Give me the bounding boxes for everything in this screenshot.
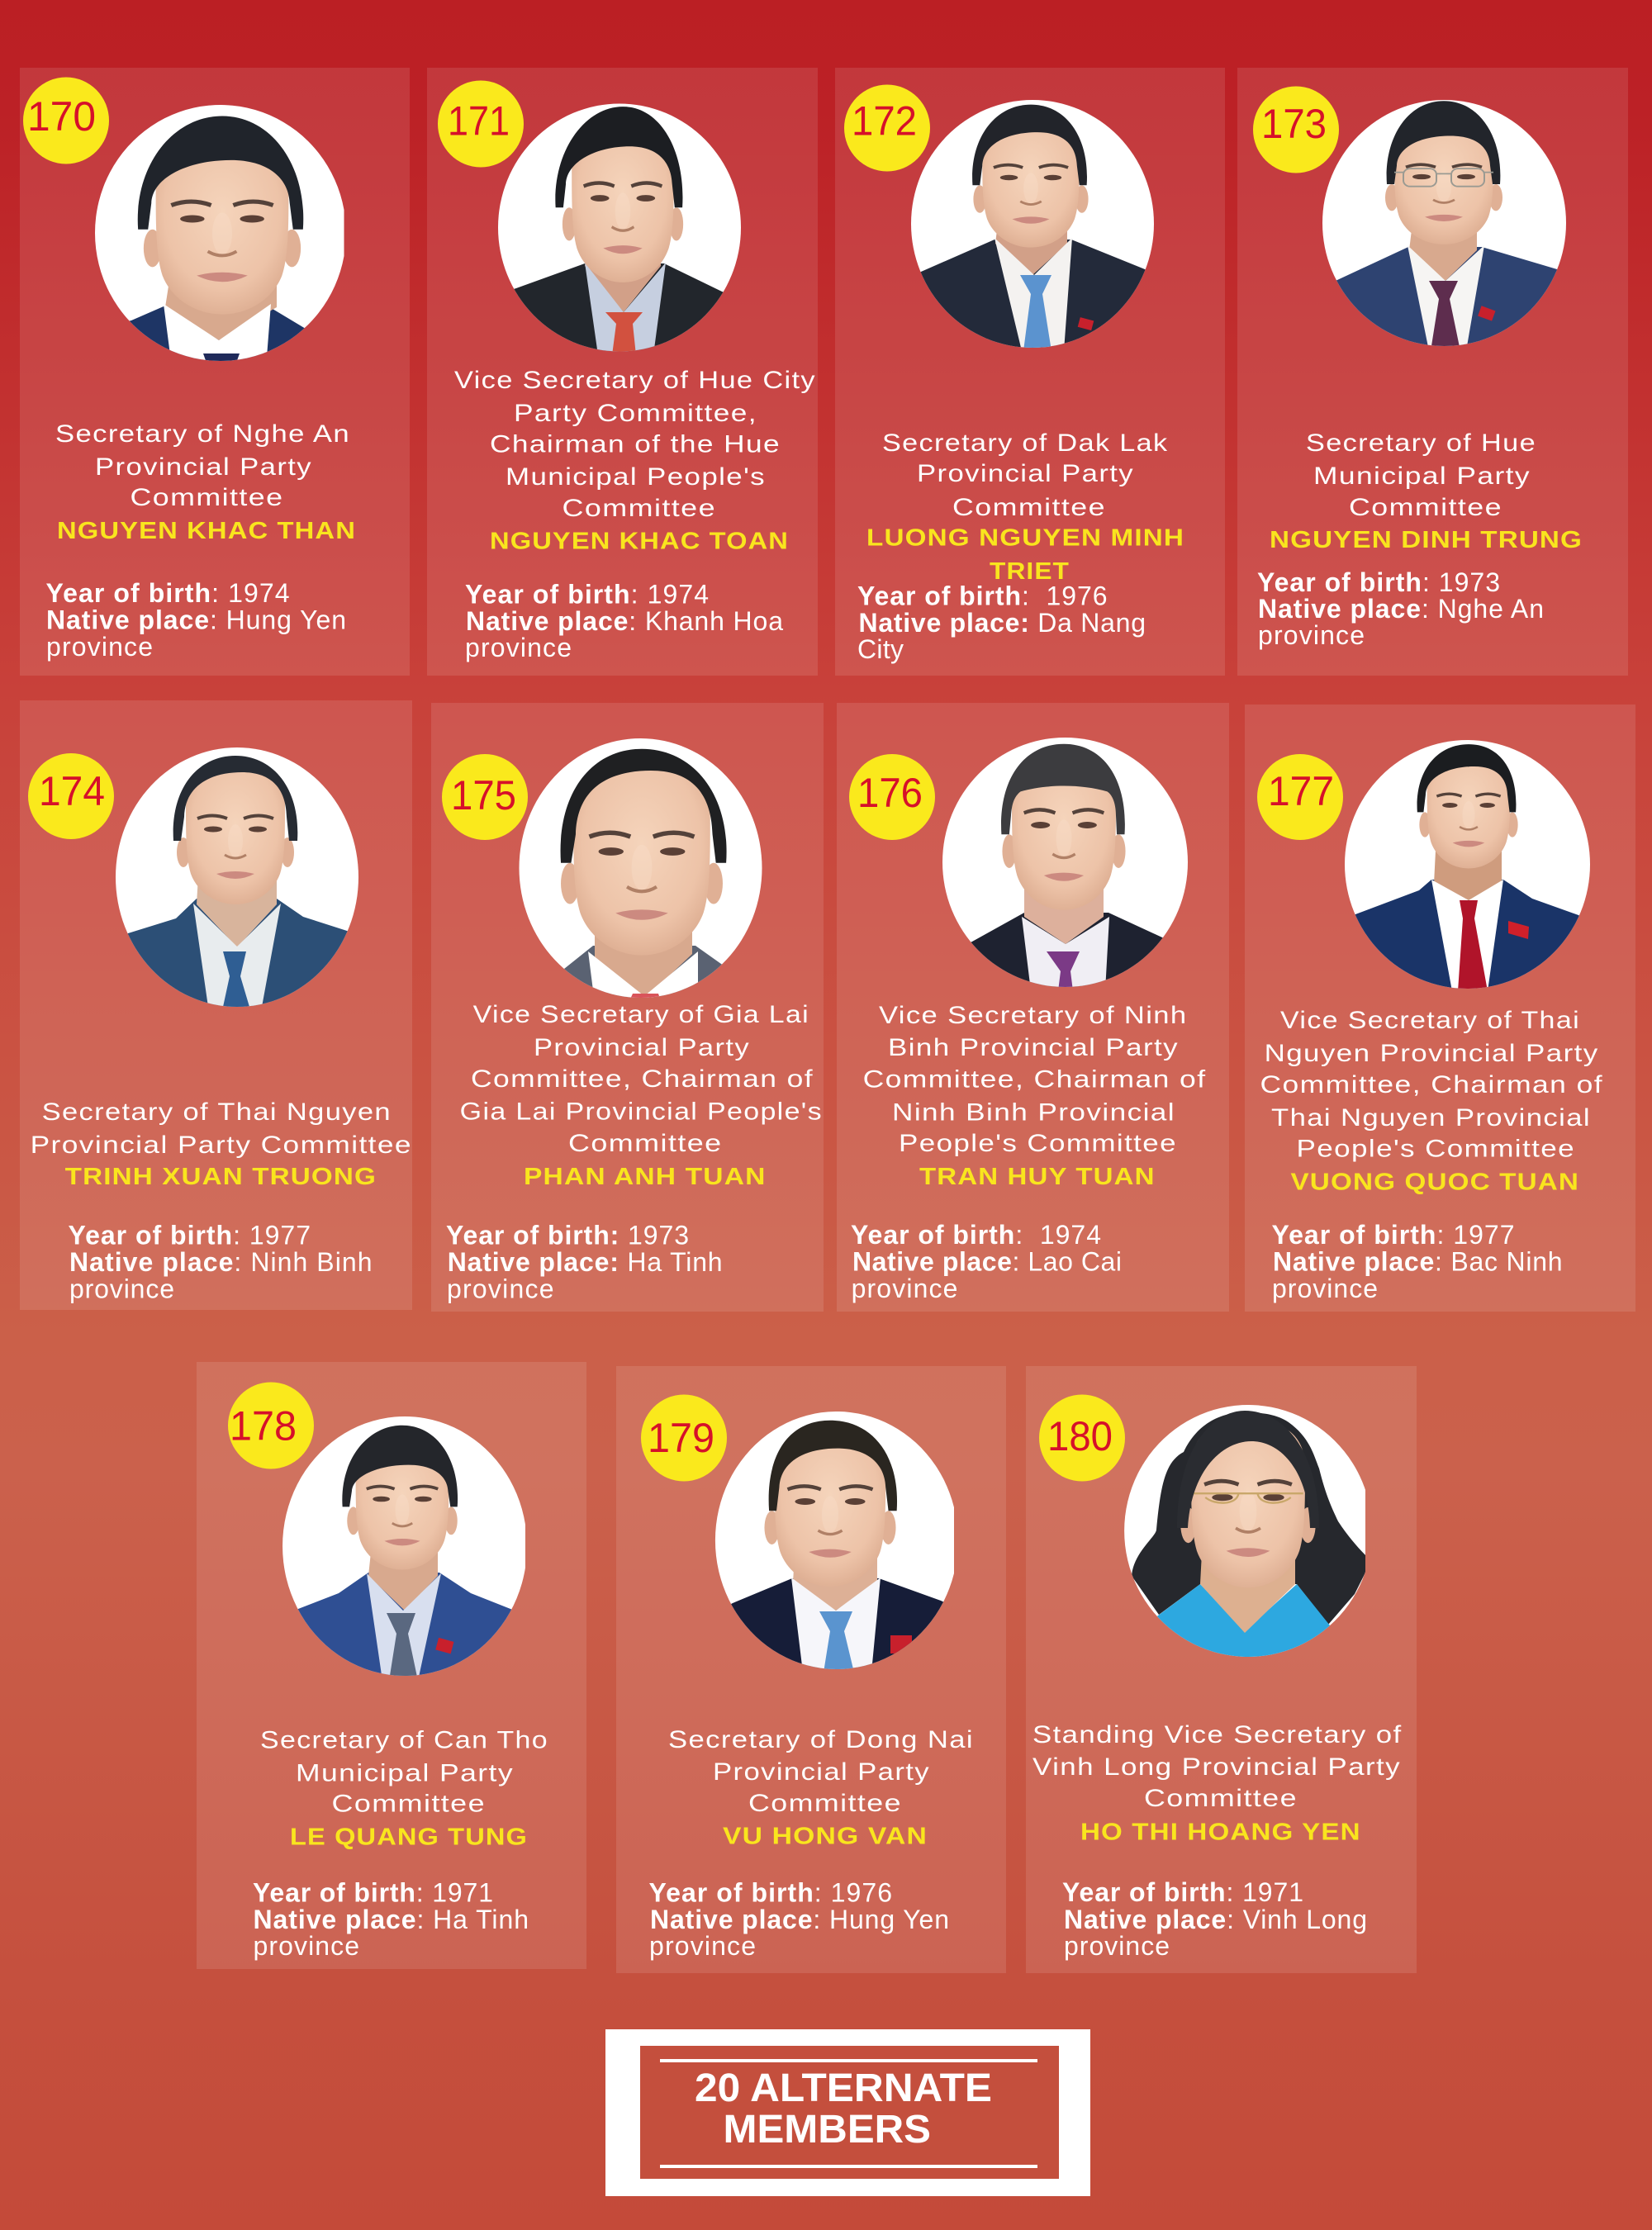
name 172: LUONG NGUYEN MINH bbox=[866, 525, 1184, 552]
role 170: Committee bbox=[131, 484, 284, 511]
panel: member 179 bbox=[616, 1366, 1006, 1973]
portrait 173 bbox=[1320, 97, 1569, 351]
details 178: Native place: Ha Tinh bbox=[253, 1905, 529, 1934]
details 179: Native place: Hung Yen bbox=[650, 1905, 949, 1934]
role 175: Gia Lai Provincial People's bbox=[460, 1098, 823, 1126]
number badge 173 bbox=[1253, 86, 1339, 173]
details 178: province bbox=[253, 1931, 359, 1961]
panel: member 170 bbox=[20, 68, 410, 676]
number badge 172 bbox=[844, 84, 930, 172]
number badge 170: 170 bbox=[27, 93, 96, 140]
role 176: Ninh Binh Provincial bbox=[892, 1099, 1175, 1127]
role 172 bbox=[882, 429, 1168, 521]
footer banner bbox=[605, 2029, 1090, 2196]
role 178 bbox=[260, 1727, 548, 1818]
details 171 bbox=[465, 580, 783, 662]
role 171 bbox=[454, 367, 816, 522]
details 172: Year of birth: 1976 bbox=[857, 581, 1107, 611]
details 173 bbox=[1257, 567, 1544, 650]
details 179: province bbox=[649, 1931, 756, 1961]
name 179: VU HONG VAN bbox=[723, 1824, 928, 1850]
role 175: Provincial Party bbox=[534, 1034, 750, 1061]
number badge 179: 179 bbox=[648, 1415, 714, 1461]
panel: member 177 bbox=[1245, 705, 1635, 1312]
details 171: Year of birth: 1974 bbox=[465, 580, 709, 610]
details 178 bbox=[253, 1878, 529, 1961]
role 176 bbox=[863, 1002, 1206, 1157]
footer title: MEMBERS bbox=[724, 2108, 931, 2152]
panel: member 174 bbox=[20, 700, 412, 1310]
role 178: Municipal Party bbox=[296, 1759, 514, 1786]
role 176: People's Committee bbox=[899, 1130, 1177, 1157]
panel: member 178 bbox=[197, 1362, 586, 1969]
panel: member 172 bbox=[835, 68, 1225, 676]
role 173: Secretary of Hue bbox=[1306, 429, 1536, 457]
name 172: TRIET bbox=[990, 558, 1070, 585]
name 173: NGUYEN DINH TRUNG bbox=[1270, 527, 1583, 553]
role 178: Committee bbox=[332, 1791, 486, 1818]
details 172: Native place: Da Nang bbox=[859, 608, 1146, 638]
number badge 173: 173 bbox=[1261, 101, 1327, 147]
details 177: province bbox=[1272, 1274, 1378, 1303]
details 177 bbox=[1272, 1220, 1563, 1303]
role 179 bbox=[668, 1726, 974, 1817]
details 175: province bbox=[447, 1274, 553, 1304]
panel: member 176 bbox=[837, 703, 1229, 1312]
role 170: Provincial Party bbox=[95, 453, 312, 481]
number badge 177: 177 bbox=[1268, 768, 1334, 814]
role 174: Provincial Party Committee bbox=[31, 1132, 412, 1159]
details 179: Year of birth: 1976 bbox=[649, 1878, 892, 1908]
portrait 179 bbox=[710, 1408, 958, 1672]
details 171: Native place: Khanh Hoa bbox=[466, 606, 783, 636]
details 174: province bbox=[69, 1274, 174, 1304]
portrait 175 bbox=[516, 735, 766, 1004]
name 177: VUONG QUOC TUAN bbox=[1290, 1170, 1579, 1196]
role 179: Committee bbox=[748, 1790, 902, 1817]
number badge 172: 172 bbox=[852, 97, 917, 144]
role 176: Committee, Chairman of bbox=[863, 1066, 1206, 1094]
role 179: Secretary of Dong Nai bbox=[668, 1726, 974, 1753]
name 180: HO THI HOANG YEN bbox=[1080, 1819, 1361, 1845]
number badge 175 bbox=[442, 754, 528, 840]
role 172: Committee bbox=[952, 494, 1106, 521]
name 175: PHAN ANH TUAN bbox=[524, 1164, 767, 1190]
portrait 178 bbox=[281, 1412, 529, 1681]
details 171: province bbox=[465, 633, 572, 662]
details 180 bbox=[1062, 1877, 1367, 1961]
number badge 179 bbox=[641, 1394, 727, 1482]
role 178: Secretary of Can Tho bbox=[260, 1727, 548, 1754]
role 177 bbox=[1260, 1007, 1603, 1163]
number badge 171 bbox=[438, 81, 524, 167]
role 174: Secretary of Thai Nguyen bbox=[42, 1098, 392, 1126]
details 170 bbox=[46, 578, 346, 662]
details 174: Native place: Ninh Binh bbox=[69, 1247, 372, 1277]
portrait 174 bbox=[116, 747, 358, 1007]
role 173 bbox=[1306, 429, 1536, 521]
number badge 178 bbox=[228, 1383, 314, 1468]
details 180: Native place: Vinh Long bbox=[1064, 1905, 1367, 1934]
role 172: Provincial Party bbox=[917, 460, 1134, 487]
number badge 174 bbox=[28, 753, 114, 839]
details 174: Year of birth: 1977 bbox=[68, 1221, 311, 1250]
details 170: Year of birth: 1974 bbox=[46, 578, 289, 608]
panel: member 173 bbox=[1237, 68, 1628, 676]
panel: member 180 bbox=[1026, 1366, 1417, 1973]
role 176: Vice Secretary of Ninh bbox=[879, 1002, 1188, 1029]
role 175: Committee bbox=[568, 1130, 723, 1157]
number badge 170 bbox=[23, 78, 109, 164]
name 178: LE QUANG TUNG bbox=[290, 1824, 528, 1850]
number badge 180 bbox=[1039, 1394, 1125, 1482]
details 178: Year of birth: 1971 bbox=[253, 1878, 493, 1908]
role 173: Committee bbox=[1349, 494, 1502, 521]
name 170: NGUYEN KHAC THAN bbox=[57, 518, 356, 544]
name 172 bbox=[866, 525, 1184, 585]
details 175: Native place: Ha Tinh bbox=[448, 1247, 723, 1277]
role 173: Municipal Party bbox=[1313, 463, 1531, 490]
footer title bbox=[695, 2066, 992, 2152]
role 177: People's Committee bbox=[1297, 1136, 1575, 1163]
name 171: NGUYEN KHAC TOAN bbox=[490, 529, 789, 555]
number badge 180: 180 bbox=[1047, 1413, 1113, 1459]
details 174 bbox=[68, 1221, 372, 1304]
details 177: Year of birth: 1977 bbox=[1272, 1220, 1515, 1250]
name 174: TRINH XUAN TRUONG bbox=[65, 1164, 377, 1190]
name 176: TRAN HUY TUAN bbox=[919, 1164, 1156, 1190]
details 176: Year of birth: 1974 bbox=[851, 1220, 1101, 1250]
number badge 171: 171 bbox=[448, 97, 510, 144]
details 170: Native place: Hung Yen bbox=[46, 605, 346, 634]
role 171: Party Committee, bbox=[514, 400, 757, 427]
details 175 bbox=[446, 1221, 723, 1304]
portrait 170 bbox=[95, 105, 344, 361]
details 173: Native place: Nghe An bbox=[1258, 594, 1544, 624]
role 177: Committee, Chairman of bbox=[1260, 1071, 1603, 1098]
role 180 bbox=[1032, 1721, 1403, 1812]
details 176: Native place: Lao Cai bbox=[852, 1247, 1122, 1277]
role 174 bbox=[31, 1098, 412, 1159]
details 175: Year of birth: 1973 bbox=[446, 1221, 689, 1250]
role 180: Committee bbox=[1144, 1785, 1298, 1812]
details 180: Year of birth: 1971 bbox=[1062, 1877, 1303, 1907]
details 179 bbox=[649, 1878, 949, 1961]
role 171: Committee bbox=[562, 495, 716, 522]
role 170: Secretary of Nghe An bbox=[55, 420, 350, 448]
role 171: Vice Secretary of Hue City bbox=[454, 367, 816, 394]
role 176: Binh Provincial Party bbox=[888, 1034, 1179, 1061]
portrait 172 bbox=[909, 97, 1156, 352]
role 179: Provincial Party bbox=[713, 1758, 930, 1786]
role 177: Vice Secretary of Thai bbox=[1280, 1007, 1580, 1034]
panel: member 175 bbox=[431, 703, 824, 1312]
number badge 176 bbox=[849, 754, 935, 840]
role 172: Secretary of Dak Lak bbox=[882, 429, 1168, 457]
number badge 175: 175 bbox=[451, 772, 516, 818]
role 177: Nguyen Provincial Party bbox=[1265, 1040, 1599, 1067]
role 171: Municipal People's bbox=[506, 463, 766, 491]
role 175 bbox=[460, 1001, 823, 1157]
details 172: City bbox=[857, 634, 904, 664]
role 175: Vice Secretary of Gia Lai bbox=[473, 1001, 809, 1028]
details 180: province bbox=[1064, 1931, 1170, 1961]
role 170 bbox=[55, 420, 350, 511]
portrait 180 bbox=[1119, 1400, 1371, 1660]
footer title: 20 ALTERNATE bbox=[695, 2066, 992, 2110]
role 175: Committee, Chairman of bbox=[471, 1065, 814, 1093]
role 180: Standing Vice Secretary of bbox=[1032, 1721, 1403, 1748]
portrait 177 bbox=[1338, 737, 1594, 991]
details 173: Year of birth: 1973 bbox=[1257, 567, 1500, 597]
role 171: Chairman of the Hue bbox=[490, 431, 781, 458]
details 172 bbox=[857, 581, 1146, 664]
details 176: province bbox=[852, 1274, 957, 1303]
role 180: Vinh Long Provincial Party bbox=[1032, 1753, 1401, 1781]
number badge 176: 176 bbox=[857, 770, 923, 816]
portrait 176 bbox=[940, 735, 1191, 991]
role 177: Thai Nguyen Provincial bbox=[1271, 1104, 1591, 1132]
details 173: province bbox=[1258, 620, 1365, 650]
number badge 177 bbox=[1257, 754, 1343, 840]
details 170: province bbox=[46, 632, 153, 662]
number badge 178: 178 bbox=[230, 1402, 297, 1449]
number badge 174: 174 bbox=[39, 768, 105, 814]
panel: member 171 bbox=[427, 68, 818, 676]
details 176 bbox=[851, 1220, 1122, 1303]
portrait 171 bbox=[498, 104, 741, 352]
details 177: Native place: Bac Ninh bbox=[1273, 1247, 1563, 1277]
